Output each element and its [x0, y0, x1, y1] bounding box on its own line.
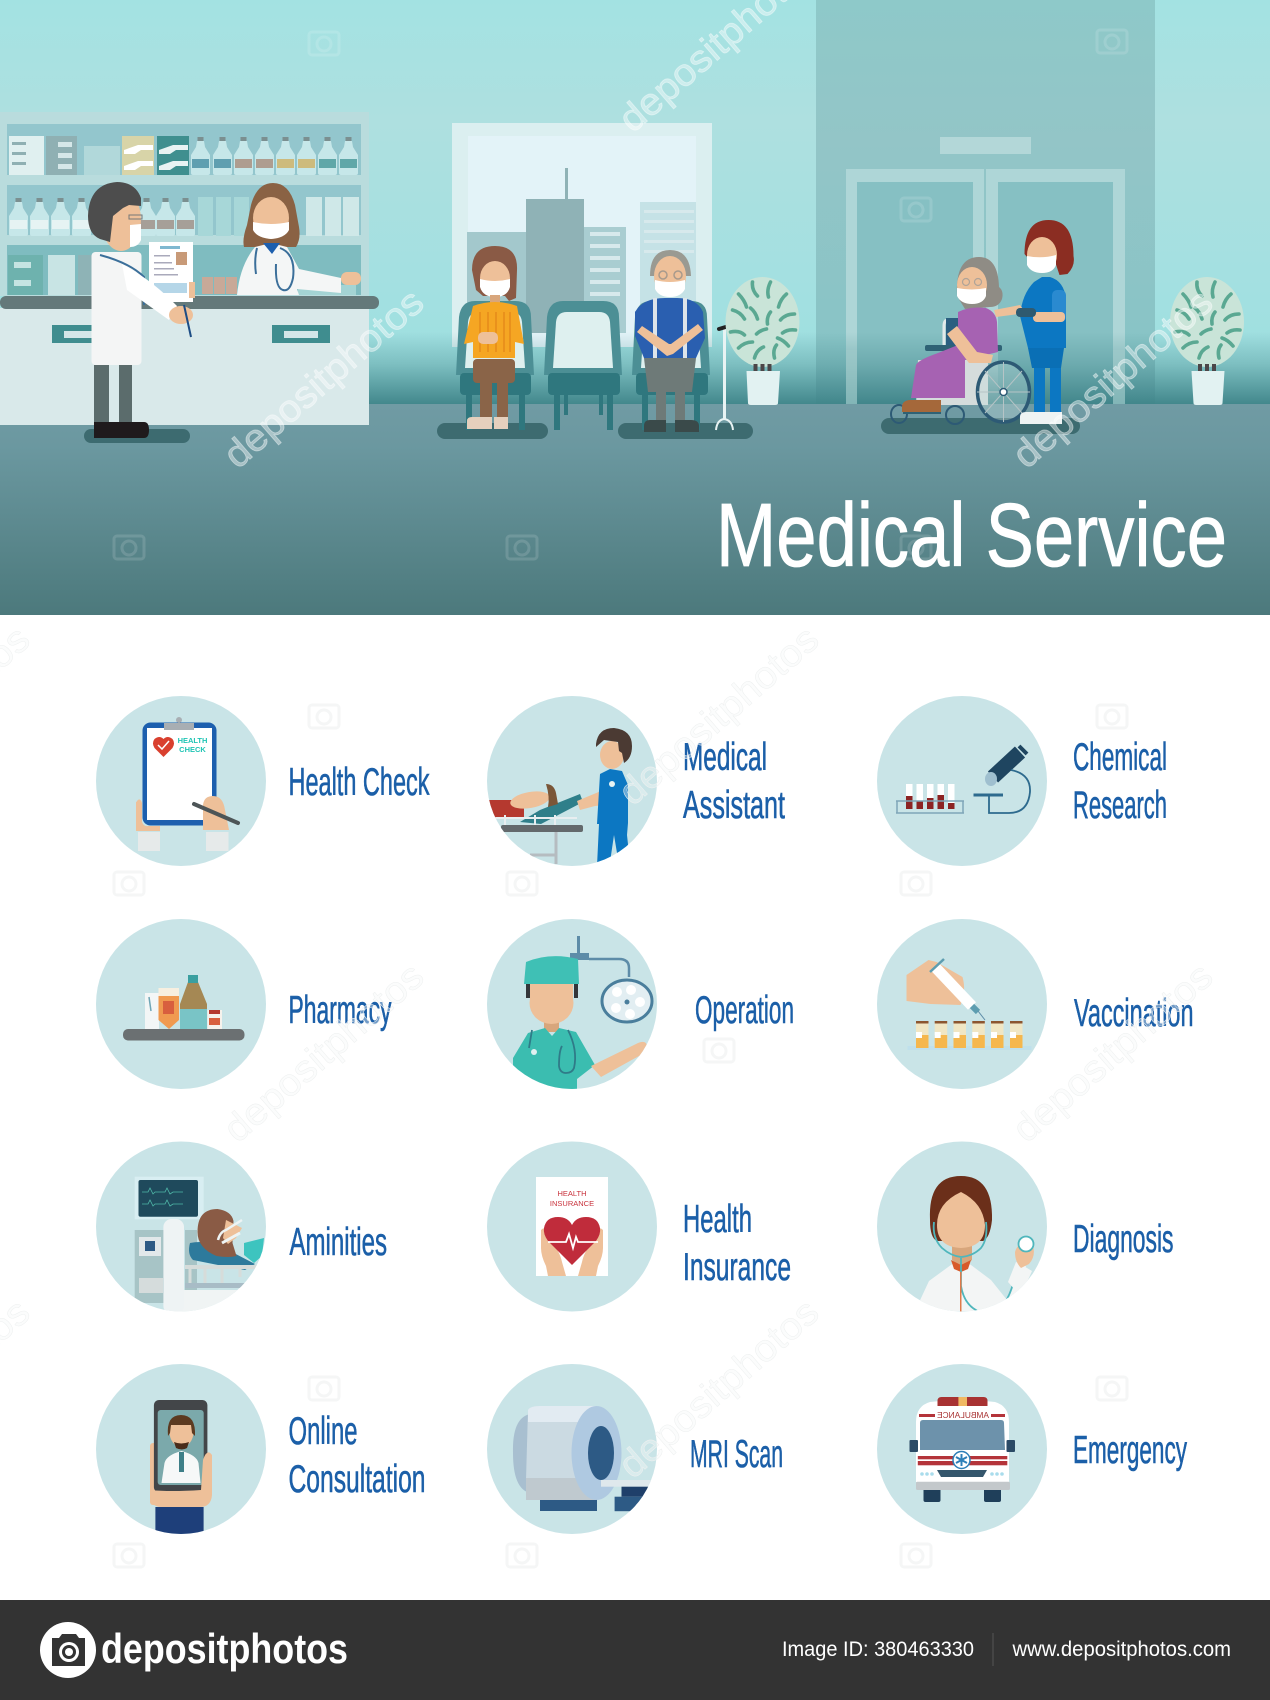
label	[683, 736, 785, 827]
label	[288, 1410, 426, 1501]
female pharmacist	[237, 183, 361, 295]
icon: doctor with stethoscope	[877, 1142, 1047, 1314]
icon: camera logo	[40, 1622, 96, 1678]
floor	[0, 404, 1270, 615]
watermarks: depositphotos	[1005, 281, 1221, 477]
service: amenities	[96, 1142, 387, 1320]
big wheel	[977, 362, 1030, 422]
label: Research	[1073, 784, 1167, 827]
icon: MRI scanner	[487, 1364, 657, 1534]
chair 3	[632, 301, 710, 375]
label: Health Check	[288, 761, 430, 804]
label: Pharmacy	[288, 989, 392, 1032]
label: Assistant	[683, 784, 785, 827]
icon: clipboard	[96, 696, 266, 866]
watermarks: depositphotos	[611, 618, 827, 814]
icon: test tubes and microscope	[877, 696, 1047, 866]
website: www.depositphotos.com	[1012, 1638, 1231, 1661]
seated woman patient	[464, 246, 524, 429]
elevator doors	[846, 169, 1125, 405]
chair 2	[544, 301, 622, 375]
icon: insurance document with heart	[487, 1142, 657, 1312]
potted plant left	[726, 277, 800, 405]
service: health insurance	[487, 1142, 791, 1312]
elevator wall	[816, 0, 1155, 404]
label: Vaccination	[1074, 992, 1194, 1035]
panel: hospital lobby banner	[0, 0, 1270, 615]
service: chemical research	[877, 696, 1167, 866]
chair 1	[456, 301, 534, 375]
potted plant right	[1170, 277, 1244, 405]
label: Aminities	[290, 1221, 387, 1264]
waiting chairs	[437, 301, 753, 439]
icon: insurance document with heart: INSURANCE	[550, 1199, 594, 1208]
label: MRI Scan	[690, 1433, 783, 1476]
service: emergency	[877, 1364, 1187, 1534]
icon: phone video call with doctor	[96, 1364, 266, 1537]
icon: nurse and patient on stretcher	[487, 696, 657, 869]
icon: ambulance front view	[877, 1364, 1047, 1534]
label: Consultation	[288, 1458, 426, 1501]
label: Online	[288, 1410, 358, 1453]
label: Emergency	[1073, 1429, 1187, 1472]
paper report	[149, 242, 193, 302]
icon: patient with ventilator monitor	[96, 1142, 266, 1320]
label: Diagnosis	[1073, 1218, 1174, 1261]
logo wordmark: depositphotos	[101, 1625, 348, 1672]
label: Chemical	[1073, 736, 1167, 779]
male doctor holding report	[84, 182, 195, 443]
seated old man with cane	[635, 250, 739, 432]
watermarks: depositphotos	[216, 281, 432, 477]
service: online consultation	[96, 1364, 426, 1537]
counter top	[0, 296, 379, 309]
icon: clipboard: HEALTH	[178, 736, 207, 745]
wall shading	[0, 332, 1270, 404]
walking cane	[716, 323, 739, 430]
icon: clipboard: CHECK	[179, 745, 206, 754]
wheelchair with patient and nurse	[881, 220, 1080, 434]
nurse pushing	[1020, 412, 1062, 424]
service: pharmacy	[96, 919, 392, 1089]
image id: Image ID: 380463330	[782, 1638, 974, 1661]
elderly woman	[957, 257, 1003, 309]
service: medical assistant	[487, 696, 785, 869]
service: MRI scan	[487, 1364, 783, 1534]
pharmacy shelves	[0, 112, 369, 296]
label: Insurance	[683, 1246, 791, 1289]
pharmacy counter	[0, 308, 369, 425]
icon: hand with syringe and vials	[877, 919, 1047, 1089]
label: Health	[683, 1198, 752, 1241]
icon: medicines on shelf	[96, 919, 266, 1089]
elevator sign	[940, 137, 1031, 154]
watermarks: depositphotos	[216, 955, 432, 1151]
service: health check	[96, 696, 430, 866]
window with city view	[452, 123, 712, 347]
mirrored ambulance text: AMBULANCE	[937, 1411, 989, 1420]
icon: insurance document with heart: HEALTH	[557, 1189, 587, 1198]
icon: surgeon with surgical lamp	[487, 919, 657, 1099]
label: Operation	[695, 989, 794, 1032]
label	[1073, 736, 1167, 827]
label	[683, 1198, 791, 1289]
footer bar	[0, 1600, 1270, 1700]
watermarks: depositphotos	[611, 1291, 827, 1487]
service: operation	[487, 919, 794, 1099]
service: diagnosis	[877, 1142, 1174, 1314]
label: Medical	[683, 736, 767, 779]
service: vaccination	[877, 919, 1194, 1089]
watermarks: depositphotos	[1005, 955, 1221, 1151]
wheelchair frame	[944, 320, 986, 348]
